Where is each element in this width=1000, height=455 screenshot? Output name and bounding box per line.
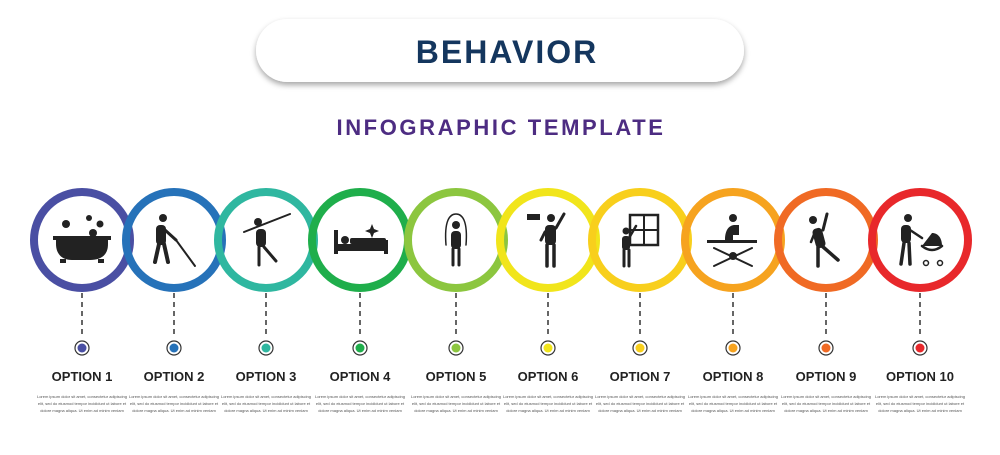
icon: person with cane: [155, 214, 195, 266]
label: OPTION 8: [703, 369, 763, 384]
option 3: elit, sed do eiusmod tempor incididunt ut labore et: [222, 401, 311, 406]
option 3: Lorem ipsum dolor sit amet, consectetur adipiscing: [221, 394, 311, 399]
option 10: [872, 192, 968, 413]
option 6: Lorem ipsum dolor sit amet, consectetur adipiscing: [503, 394, 593, 399]
icon: ironing board: [707, 214, 757, 266]
icon: jump rope: [446, 214, 466, 265]
option 9: Lorem ipsum dolor sit amet, consectetur adipiscing: [781, 394, 871, 399]
icon: bed: [334, 224, 388, 254]
option 6: [500, 192, 596, 413]
option 4: dolore magna aliqua. Ut enim ad minim veniam: [318, 408, 402, 413]
label: OPTION 6: [518, 369, 578, 384]
icon: bathtub: [53, 215, 111, 263]
option 6: dolore magna aliqua. Ut enim ad minim veniam: [506, 408, 590, 413]
option 9: elit, sed do eiusmod tempor incididunt ut labore et: [782, 401, 871, 406]
option 10: elit, sed do eiusmod tempor incididunt ut labore et: [876, 401, 965, 406]
option 7: dolore magna aliqua. Ut enim ad minim veniam: [598, 408, 682, 413]
option 1: Lorem ipsum dolor sit amet, consectetur adipiscing: [37, 394, 127, 399]
option 9: dolore magna aliqua. Ut enim ad minim veniam: [784, 408, 868, 413]
label: OPTION 7: [610, 369, 670, 384]
option 2: Lorem ipsum dolor sit amet, consectetur adipiscing: [129, 394, 219, 399]
option 1: [34, 192, 130, 413]
option 3: dolore magna aliqua. Ut enim ad minim veniam: [224, 408, 308, 413]
option 9: [778, 192, 874, 413]
option 4: [312, 192, 408, 413]
option 4: elit, sed do eiusmod tempor incididunt ut labore et: [316, 401, 405, 406]
label: OPTION 4: [330, 369, 391, 384]
label: OPTION 3: [236, 369, 296, 384]
option 2: elit, sed do eiusmod tempor incididunt ut labore et: [130, 401, 219, 406]
option 5: dolore magna aliqua. Ut enim ad minim veniam: [414, 408, 498, 413]
option 7: elit, sed do eiusmod tempor incididunt ut labore et: [596, 401, 685, 406]
option 4: Lorem ipsum dolor sit amet, consectetur adipiscing: [315, 394, 405, 399]
option 10: dolore magna aliqua. Ut enim ad minim veniam: [878, 408, 962, 413]
option 7: [592, 192, 688, 413]
subtitle: INFOGRAPHIC TEMPLATE: [336, 115, 666, 140]
option 2: dolore magna aliqua. Ut enim ad minim veniam: [132, 408, 216, 413]
icon: person with stroller: [901, 214, 942, 266]
option 5: elit, sed do eiusmod tempor incididunt ut labore et: [412, 401, 501, 406]
option 1: elit, sed do eiusmod tempor incididunt ut labore et: [38, 401, 127, 406]
option 6: elit, sed do eiusmod tempor incididunt ut labore et: [504, 401, 593, 406]
title pill: [256, 19, 744, 82]
label: OPTION 10: [886, 369, 954, 384]
icon: javelin: [244, 214, 290, 265]
title: BEHAVIOR: [416, 34, 598, 70]
option 5: [408, 192, 504, 413]
option 7: Lorem ipsum dolor sit amet, consectetur adipiscing: [595, 394, 685, 399]
option 10: Lorem ipsum dolor sit amet, consectetur adipiscing: [875, 394, 965, 399]
option 8: elit, sed do eiusmod tempor incididunt ut labore et: [689, 401, 778, 406]
option 8: Lorem ipsum dolor sit amet, consectetur adipiscing: [688, 394, 778, 399]
option 8: dolore magna aliqua. Ut enim ad minim veniam: [691, 408, 775, 413]
icon: cleaning window: [622, 215, 658, 266]
option 1: dolore magna aliqua. Ut enim ad minim veniam: [40, 408, 124, 413]
icon: person stretching: [809, 214, 838, 266]
label: OPTION 9: [796, 369, 856, 384]
option 2: [126, 192, 222, 413]
label: OPTION 2: [144, 369, 204, 384]
option 5: Lorem ipsum dolor sit amet, consectetur adipiscing: [411, 394, 501, 399]
icon: person waving with speech bubble: [527, 214, 564, 266]
option 3: [218, 192, 314, 413]
option 8: [685, 192, 781, 413]
label: OPTION 5: [426, 369, 486, 384]
label: OPTION 1: [52, 369, 112, 384]
